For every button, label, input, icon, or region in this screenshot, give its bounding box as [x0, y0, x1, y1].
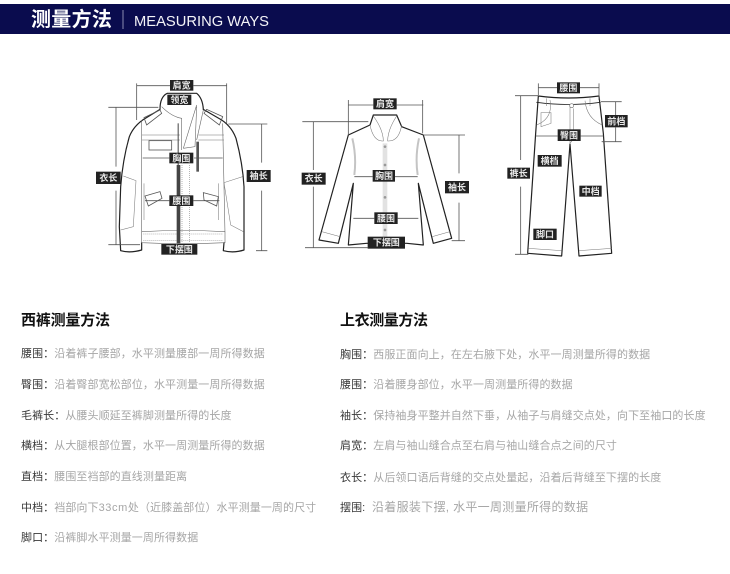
jacket outline [119, 93, 244, 252]
header divider [122, 10, 124, 29]
body length measure [302, 122, 368, 248]
header title english: MEASURING WAYS [134, 13, 269, 30]
body length measure [96, 107, 158, 245]
diagram: shirt [302, 98, 469, 249]
front rise measure: 前档 [607, 115, 625, 126]
chest measure: 胸围 [375, 170, 393, 181]
collar width label: 领宽 [170, 94, 188, 105]
panel: trousers measuring method [21, 311, 316, 544]
shirt buttons [384, 145, 386, 231]
row: length: 毛裤长：从腰头顺延至裤脚测量所得的长度 [21, 408, 232, 422]
shirt outline [319, 115, 452, 245]
thigh label [538, 155, 562, 167]
trousers outline [528, 96, 612, 256]
waist measure [538, 82, 599, 100]
diagram: jacket [96, 80, 271, 255]
row: chest: 胸围：西服正面向上，在左右腋下处，水平一周测量所得的数据 [340, 347, 650, 361]
shoulder width measure: 肩宽 [173, 80, 191, 91]
shoulder width measure [348, 98, 423, 135]
hem measure [368, 237, 405, 249]
header banner [0, 4, 730, 34]
hem measure: 下摆围 [166, 244, 193, 255]
front rise measure [601, 102, 628, 142]
collar width label [167, 94, 191, 105]
row: sleeve: 袖长：保持袖身平整并自然下垂，从袖子与肩缝交点处，向下至袖口的长度 [340, 408, 706, 422]
shoulder width measure: 肩宽 [376, 98, 394, 109]
sleeve length measure [228, 124, 271, 251]
heading: jacket: 上衣测量方法 [340, 311, 428, 329]
row: length: 衣长：从后领口语后背缝的交点处量起，沿着后背缝至下摆的长度 [340, 470, 661, 484]
waist measure [145, 195, 219, 206]
row: thigh: 横档：从大腿根部位置，水平一周测量所得的数据 [21, 438, 265, 452]
waist measure [353, 212, 418, 224]
hip measure [536, 129, 603, 141]
waist measure: 腰围 [559, 83, 577, 93]
row: hem: 沿着服装下摆, 水平一周测量所得的数据 [372, 499, 588, 514]
hem measure: 下摆围 [373, 237, 400, 248]
row: knee: 中档：裆部向下33cm处（近膝盖部位）水平测量一周的尺寸 [21, 500, 316, 514]
knee label: 中档 [582, 185, 600, 196]
leg opening label: 脚口 [536, 229, 554, 240]
trouser length measure [507, 96, 538, 254]
sleeve length measure: 袖长 [448, 181, 466, 192]
row: waist: 腰围：沿着腰身部位，水平一周测量所得的数据 [340, 377, 573, 391]
panel: jacket measuring method [340, 311, 706, 514]
waist measure: 腰围 [377, 213, 395, 223]
shoulder width measure [137, 80, 227, 123]
hip measure: 臀围 [560, 130, 578, 140]
heading: trousers: 西裤测量方法 [21, 311, 110, 329]
thigh label: 横档 [541, 155, 559, 166]
row: hem: 摆围: [340, 500, 365, 514]
chest measure [143, 152, 223, 163]
leg opening label [533, 229, 557, 240]
diagram: trousers [507, 82, 628, 256]
hem measure [161, 244, 197, 255]
waist measure: 腰围 [172, 196, 190, 206]
row: leg opening: 脚口：沿裤脚水平测量一周所得数据 [21, 530, 198, 544]
trouser length measure: 裤长 [510, 167, 528, 178]
sleeve length measure: 袖长 [250, 170, 268, 181]
chest measure: 胸围 [172, 152, 190, 163]
row: hip: 臀围：沿着臀部宽松部位，水平测量一周所得数据 [21, 377, 265, 391]
row: rise: 直档：腰围至裆部的直线测量距离 [21, 469, 187, 483]
row: waist: 腰围：沿着裤子腰部，水平测量腰部一周所得数据 [21, 346, 265, 360]
row: shoulder: 肩宽：左肩与袖山缝合点至右肩与袖山缝合点之间的尺寸 [340, 438, 617, 452]
body length measure: 衣长 [305, 173, 323, 184]
sleeve length measure [423, 135, 469, 241]
chest measure [354, 170, 418, 182]
header title chinese: 测量方法 [31, 7, 112, 31]
body length measure: 衣长 [99, 172, 117, 183]
jacket center zipper [177, 123, 180, 167]
